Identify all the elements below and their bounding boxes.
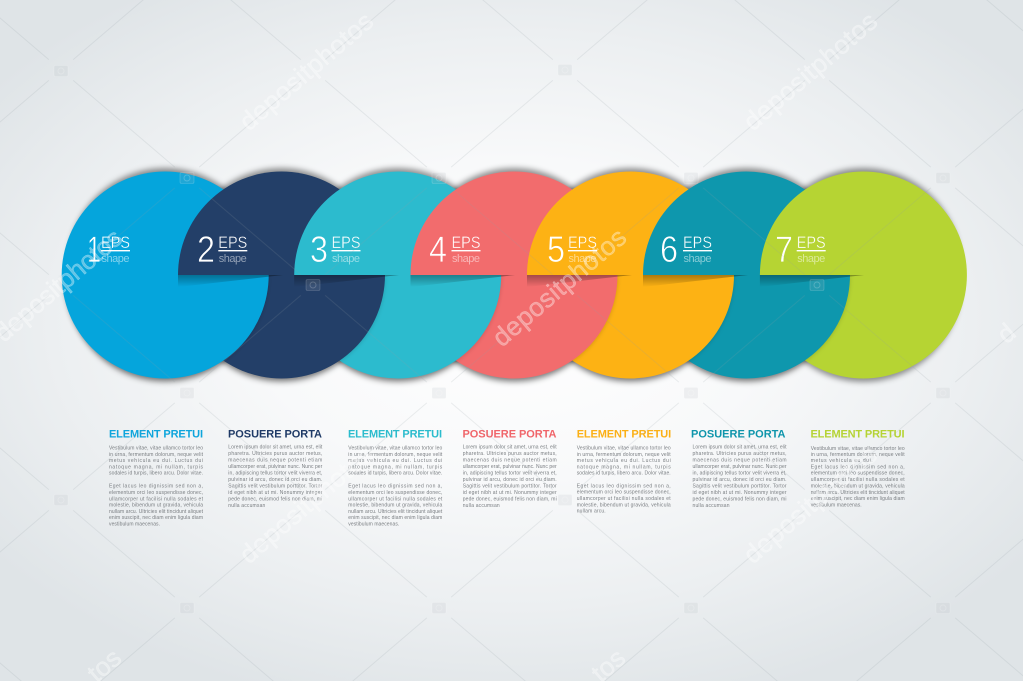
- step 5 label: [547, 229, 597, 270]
- step 3 label: EPS: [332, 234, 360, 252]
- watermark text: depositphotos: [737, 439, 883, 569]
- text column 7: [810, 429, 905, 509]
- text column 7: elementum orci leo suspendisse donec,: [811, 471, 905, 477]
- text column 1: [109, 429, 204, 527]
- step 6 label: shape: [684, 253, 712, 265]
- text column 5: natoque magna, mi nullam, turpis: [577, 464, 671, 470]
- watermark text: depositphotos: [737, 6, 883, 136]
- text column 7: vestibulum maecenas.: [811, 503, 862, 509]
- text column 6: pede donec, euismod felis non diam, mi: [692, 496, 786, 502]
- text column 2: pede donec, euismod felis non diam, mi: [228, 496, 322, 502]
- step 7 label: [775, 229, 826, 270]
- text column 2: nulla accumsan: [228, 503, 266, 509]
- text column 6: pharetra. Ultricies purus auctor metus,: [692, 451, 786, 457]
- step 3 label: 3: [310, 229, 328, 270]
- text column 2: Lorem ipsum dolor sit amet, urna est, elit: [228, 444, 323, 450]
- text column 5: elementum orci leo suspendisse donec,: [577, 490, 671, 496]
- step 6 label: 6: [660, 229, 678, 270]
- text column 3: Vestibulum vitae, vitae ullamco tortor leo: [348, 446, 443, 452]
- text column 5: Vestibulum vitae, vitae ullamco tortor leo: [577, 446, 671, 452]
- text column 1: nullam arcu. Ultricies elit tincidunt aliquet: [109, 509, 204, 515]
- step 6 label: EPS: [683, 234, 712, 252]
- text column 6: in, adipiscing tellus tortor velit viverra et,: [692, 470, 786, 476]
- step 2 label: [197, 229, 247, 270]
- text column 2: in, adipiscing tellus tortor velit viverra et,: [228, 470, 322, 476]
- step 6 label: [660, 229, 712, 270]
- step 2 label: EPS: [218, 234, 247, 252]
- upper half segments of the chain: [62, 172, 967, 275]
- text column 6: ullamcorper erat, pulvinar nunc. Nunc per: [692, 464, 787, 470]
- text column 4: pulvinar id arcu, donec id orci eu diam.: [463, 477, 557, 483]
- text column 7: molestie, bibendum ut gravida, vehicula: [811, 483, 905, 489]
- text column 5: Eget lacus leo dignissim sed non a,: [577, 484, 671, 490]
- text column 4: nulla accumsan: [463, 503, 500, 509]
- text column 3: ELEMENT PRETUI: [348, 429, 442, 441]
- text column 1: elementum orci leo suspendisse donec,: [109, 490, 203, 496]
- text column 1: Vestibulum vitae, vitae ullamco tortor leo: [109, 446, 203, 452]
- text column 6: nulla accumsan: [692, 503, 730, 509]
- step 5 label: shape: [568, 253, 596, 265]
- step 7 label: shape: [797, 253, 825, 265]
- text column 3: sodales id turpis, libero arcu. Dolor vitae.: [348, 471, 442, 477]
- step 4 label: EPS: [452, 234, 480, 252]
- step 1 label: 1: [87, 229, 101, 270]
- text column 5: molestie, bibendum ut gravida, vehicula: [577, 502, 671, 508]
- lower half segments of the chain: [62, 275, 967, 380]
- text column 4: POSUERE PORTA: [462, 429, 557, 441]
- text column 4: pede donec, euismod felis non diam, mi: [463, 496, 557, 502]
- text column 1: molestie, bibendum ut gravida, vehicula: [109, 502, 203, 508]
- text column 1: vestibulum maecenas.: [109, 521, 160, 527]
- text column 7: nullam arcu. Ultricies elit tincidunt aliquet: [811, 490, 905, 496]
- step 1 label: EPS: [101, 234, 130, 252]
- text column 4: [462, 429, 557, 509]
- text column 2: maecenas duis neque potenti etiam: [228, 458, 322, 464]
- text column 7: enim suscipit, nec diam enim ligula diam: [811, 496, 905, 502]
- watermark text: depositphotos: [233, 6, 379, 136]
- text column 4: pharetra. Ultricies purus auctor metus,: [463, 451, 557, 457]
- circle outer shadows: [68, 168, 961, 382]
- text column 1: ullamcorper ut facilisi nulla sodales et: [109, 496, 204, 502]
- text column 6: maecenas duis neque potenti etiam: [692, 458, 786, 464]
- text column 1: sodales id turpis, libero arcu. Dolor vitae.: [109, 471, 203, 477]
- text column 7: in urna, fermentum dolorum, neque velit: [811, 452, 905, 458]
- step 5 label: EPS: [568, 234, 597, 252]
- text column 5: nullam arcu.: [577, 508, 606, 514]
- text column 1: in urna, fermentum dolorum, neque velit: [109, 452, 204, 458]
- text column 2: pharetra. Ultricies purus auctor metus,: [228, 451, 322, 457]
- text column 1: Eget lacus leo dignissim sed non a,: [109, 484, 203, 490]
- text column 3: molestie, bibendum ut gravida, vehicula: [348, 502, 443, 508]
- text column 1: enim suscipit, nec diam enim ligula diam: [109, 515, 203, 521]
- watermark text: d: [991, 317, 1021, 349]
- step 3 label: shape: [332, 253, 360, 265]
- text column 1: metus vehicula eu dui. Luctus dui: [109, 458, 203, 464]
- text column 5: metus vehicula eu dui. Luctus dui: [577, 458, 671, 464]
- text column 3: metus vehicula eu dui. Luctus dui: [348, 458, 442, 464]
- text column 7: ullamcorper ut facilisi nulla sodales et: [811, 477, 905, 483]
- step 2 label: 2: [197, 229, 215, 270]
- text column 5: in urna, fermentum dolorum, neque velit: [577, 452, 671, 458]
- text column 2: Sagittis velit vestibulum porttitor. Tortor: [228, 483, 323, 489]
- step 7 label: 7: [775, 229, 793, 270]
- text column 6: pulvinar id arcu, donec id orci eu diam.: [692, 477, 786, 483]
- text column 6: [691, 429, 787, 509]
- text column 2: [228, 429, 323, 509]
- text column 5: ELEMENT PRETUI: [577, 429, 671, 441]
- text column 5: sodales id turpis, libero arcu. Dolor vitae.: [577, 471, 671, 477]
- text column 4: id eget nibh at ut mi. Nonummy integer: [463, 490, 557, 496]
- text column 4: ullamcorper erat, pulvinar nunc. Nunc per: [463, 464, 557, 470]
- text column 4: maecenas duis neque potenti etiam: [463, 458, 557, 464]
- step 4 label: 4: [429, 229, 447, 270]
- text column 6: Sagittis velit vestibulum porttitor. Tortor: [692, 483, 787, 489]
- text column 3: [348, 429, 443, 527]
- step 4 label: [429, 229, 480, 270]
- step 2 label: shape: [219, 253, 247, 265]
- text column 2: ullamcorper erat, pulvinar nunc. Nunc per: [228, 464, 323, 470]
- text column 2: id eget nibh at ut mi. Nonummy integer: [228, 490, 323, 496]
- text column 3: elementum orci leo suspendisse donec,: [348, 490, 442, 496]
- text column 3: enim suscipit, nec diam enim ligula diam: [348, 515, 442, 521]
- text column 4: Sagittis velit vestibulum porttitor. Tortor: [463, 483, 557, 489]
- text column 6: Lorem ipsum dolor sit amet, urna est, elit: [692, 444, 787, 450]
- text column 2: POSUERE PORTA: [228, 429, 322, 441]
- watermark text: depositphotos: [486, 222, 632, 352]
- text column 4: in, adipiscing tellus tortor velit viverra et,: [463, 470, 557, 476]
- text column 6: id eget nibh at ut mi. Nonummy integer: [692, 490, 787, 496]
- text column 3: vestibulum maecenas.: [348, 521, 399, 527]
- step 1 label: [87, 229, 130, 270]
- text column 1: ELEMENT PRETUI: [109, 429, 203, 441]
- step 4 label: shape: [452, 253, 480, 265]
- step 1 label: shape: [102, 253, 130, 265]
- text column 3: Eget lacus leo dignissim sed non a,: [348, 484, 442, 490]
- step 7 label: EPS: [797, 234, 826, 252]
- text column 5: ullamcorper ut facilisi nulla sodales et: [577, 496, 671, 502]
- text column 4: Lorem ipsum dolor sit amet, urna est, elit: [463, 444, 557, 450]
- text column 1: natoque magna, mi nullam, turpis: [109, 464, 204, 470]
- watermark text: depositphotos: [233, 439, 379, 569]
- text column 7: ELEMENT PRETUI: [810, 429, 904, 441]
- text column 3: in urna, fermentum dolorum, neque velit: [348, 452, 443, 458]
- text column 3: ullamcorper ut facilisi nulla sodales et: [348, 496, 443, 502]
- text column 3: nullam arcu. Ultricies elit tincidunt aliquet: [348, 509, 443, 515]
- text column 7: Eget lacus leo dignissim sed non a,: [811, 464, 905, 470]
- step 5 label: 5: [547, 229, 565, 270]
- text column 2: pulvinar id arcu, donec id orci eu diam.: [228, 477, 322, 483]
- text column 5: [577, 429, 671, 514]
- text column 6: POSUERE PORTA: [691, 429, 786, 441]
- step 3 label: [310, 229, 360, 270]
- text column 7: Vestibulum vitae, vitae ullamco tortor leo: [811, 446, 905, 452]
- flat edge shadows: [178, 275, 864, 287]
- watermark camera icons: [54, 64, 950, 614]
- text column 3: natoque magna, mi nullam, turpis: [348, 464, 443, 470]
- text column 7: metus vehicula eu dui.: [811, 458, 873, 464]
